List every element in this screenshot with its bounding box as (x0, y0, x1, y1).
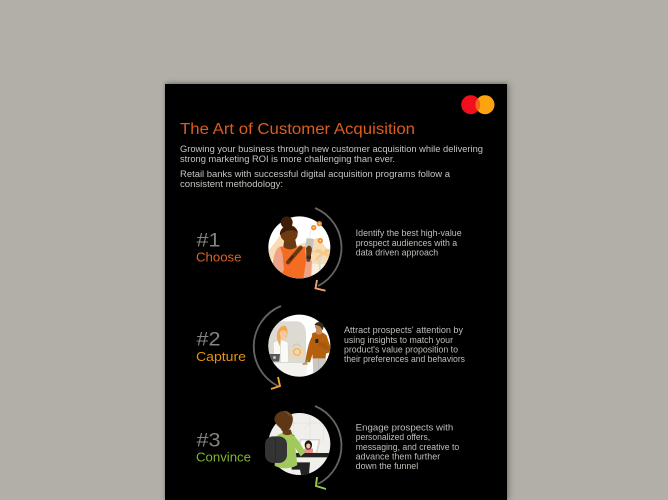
illustration: shopper and sales assistant (267, 315, 332, 378)
step 3 label (196, 431, 251, 465)
step 1 label: Choose (196, 250, 242, 265)
step 2 description: their preferences and behaviors (344, 354, 466, 364)
step 2 label (196, 330, 246, 364)
step 3 description: messaging, and creative to (356, 442, 459, 452)
step 1 label (196, 231, 242, 265)
step 3 description: down the funnel (356, 461, 418, 471)
intro text: consistent methodology: (180, 179, 283, 189)
title: The Art of Customer Acquisition (180, 121, 415, 138)
intro text: Growing your business through new customer acquisition while delivering (180, 144, 483, 154)
step 2 description: using insights to match your (344, 335, 453, 345)
step 3 description: personalized offers, (356, 432, 430, 442)
intro text: strong marketing ROI is more challenging than ever. (180, 154, 395, 164)
step 3 label: #3 (196, 431, 220, 452)
step 2 label: Capture (196, 349, 246, 364)
illustration: woman using a phone (267, 216, 332, 280)
step 1 description: prospect audiences with a (356, 238, 457, 248)
intro text (180, 144, 483, 189)
panel: black document page (165, 84, 507, 500)
step 1 description: Identify the best high-value (356, 228, 462, 238)
infographic content (180, 95, 494, 490)
step 2 label: #2 (196, 330, 220, 351)
illustration: customer on a video call (265, 411, 333, 478)
step 1 description (356, 228, 462, 258)
step 2 description: product's value proposition to (344, 344, 458, 354)
arrow: step 3 curve (315, 406, 341, 489)
step 1 description: data driven approach (356, 248, 438, 258)
step 3 label: Convince (196, 450, 251, 465)
step 2 description: Attract prospects' attention by (344, 325, 464, 335)
step 3 description: Engage prospects with (356, 423, 453, 433)
intro text: Retail banks with successful digital acquisition programs follow a (180, 169, 451, 179)
step 2 description (344, 325, 466, 364)
step 1 label: #1 (196, 231, 220, 252)
icon: two-circle logo (461, 95, 494, 114)
arrow: step 1 curve (315, 208, 341, 291)
step 3 description: advance them further (356, 452, 440, 462)
arrow: step 2 curve (254, 306, 281, 389)
step 3 description (356, 423, 459, 471)
